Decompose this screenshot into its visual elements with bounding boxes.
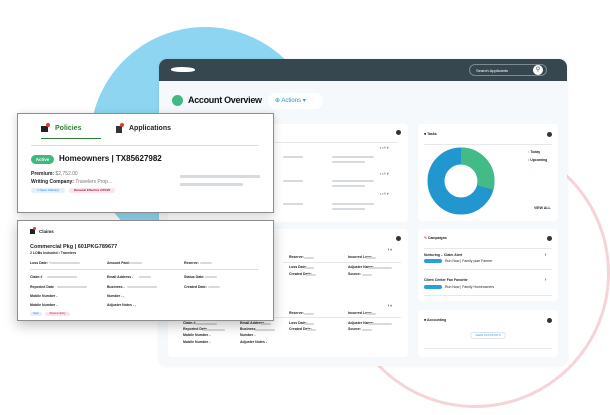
- claim title: 2 LOBs Included • Travelers: [30, 251, 76, 255]
- background: blue circle: [90, 27, 320, 257]
- card: policies list: [168, 124, 408, 222]
- card: tasks: [418, 124, 558, 221]
- card: claims list: Mobile Number -: [183, 333, 210, 337]
- card: accounting: VIEW ACCOUNTS: [475, 333, 501, 337]
- claims heading: Claims: [39, 229, 54, 234]
- card: claims list: Created Date:: [289, 327, 312, 331]
- claim fields: Email Address -: [107, 275, 133, 279]
- background: pink ring: [340, 138, 610, 408]
- policy details: Renewal Effective 2/15/25: [74, 188, 110, 192]
- claim fields: [30, 261, 259, 316]
- card: tasks: VIEW ALL: [534, 206, 551, 210]
- claim fields: Number - ,: [107, 294, 124, 298]
- card: claims list: Incurred Loss:: [348, 255, 372, 259]
- actions button: [268, 93, 323, 109]
- policy details: Writing Company: Travelers Prop...: [31, 179, 112, 185]
- card: claims list: Reserve:: [289, 311, 304, 315]
- card: claims list: Number -: [240, 333, 255, 337]
- tab: applications: [116, 123, 171, 133]
- policy details: Premium: $2,752.00: [31, 171, 78, 177]
- search box: [469, 64, 547, 76]
- policy title: Active: [36, 157, 49, 162]
- card: campaigns: ✎ Campaigns: [424, 236, 447, 240]
- account overview heading: Account Overview: [188, 95, 262, 105]
- claim title: Commercial Pkg | 601PKG789677: [30, 244, 117, 250]
- claim fields: Adjuster Notes - ,: [107, 303, 136, 307]
- tab: policies: [41, 123, 101, 139]
- card: claims list: ⁞ ˅: [388, 304, 392, 308]
- claim fields: Loss Date: ': [30, 261, 50, 265]
- dashboard window: [159, 59, 567, 366]
- card: claims list: Adjuster Name:: [348, 265, 374, 269]
- card: claims list: Source:: [348, 327, 361, 331]
- card: claims list: ⁞ ˅: [388, 248, 392, 252]
- header bar: [159, 59, 567, 81]
- claim fields: Amount Paid:: [107, 261, 130, 265]
- claim fields: Status Date:: [184, 275, 204, 279]
- card: tasks: • Upcoming: [528, 158, 547, 162]
- policy title: Homeowners | TX85627982: [59, 154, 162, 163]
- card: claims list: Reported Date: [183, 327, 207, 331]
- policy details: 1 Open Claim(s): [37, 188, 59, 192]
- card: claims list: Mobile Number -: [183, 340, 210, 344]
- icon: user: [172, 95, 183, 106]
- claim fields: Business -: [107, 285, 125, 289]
- card: claims list: Reserve:: [289, 255, 304, 259]
- card: campaigns: Nurturing – Claim Alert: [424, 253, 462, 257]
- card: claims list: Created Date:: [289, 272, 312, 276]
- icon: search: [533, 65, 543, 75]
- card: claims list: Loss Date:: [289, 265, 307, 269]
- card: policies list: ▪ ▪ ⁞ ˅: [380, 192, 389, 196]
- legend: • Today: [528, 150, 540, 154]
- card: campaigns: ⁞: [545, 278, 546, 282]
- claim fields: Open: [33, 312, 39, 315]
- panel: policies popup: [17, 113, 274, 213]
- claim fields: Mobile Number -: [30, 303, 57, 307]
- card: claims list: Loss Date:: [289, 321, 307, 325]
- card: accounting: [418, 310, 558, 357]
- claim fields: Reserve Entry: [50, 312, 65, 315]
- card: claims list: Email Address -: [240, 321, 266, 325]
- icon: search: ⚲: [536, 67, 540, 73]
- card: campaigns: ⁞: [545, 253, 546, 257]
- claim fields: Created Date:: [184, 285, 207, 289]
- tab: policies: Policies: [55, 125, 81, 132]
- card: claims list: [168, 229, 408, 357]
- claim fields: Mobile Number -: [30, 294, 57, 298]
- claim fields: Claim #: [30, 275, 42, 279]
- card: tasks: ■ Tasks: [424, 132, 437, 136]
- claims heading: [30, 227, 54, 234]
- card: claims list: Incurred Loss:: [348, 311, 372, 315]
- card: claims list: Adjuster Notes -: [240, 340, 267, 344]
- claim title: [30, 244, 117, 255]
- logo: leaping cat: [171, 67, 195, 72]
- claim fields: Reported Date: [30, 285, 54, 289]
- card: policies list: ▪ ▪ ⁞ ˅: [380, 172, 389, 176]
- card: campaigns: Run Now | Family plan Farmer: [445, 259, 492, 263]
- policy details: [31, 171, 115, 193]
- card: claims list: Business -: [240, 327, 258, 331]
- card: claims list: Claim #: [183, 321, 195, 325]
- donut chart: [428, 148, 494, 214]
- claim fields: Reserve:: [184, 261, 199, 265]
- search box: Search Applicants: [476, 68, 508, 73]
- card: accounting: ■ Accounting: [424, 318, 446, 322]
- panel: claims popup: [17, 220, 274, 321]
- tab: applications: Applications: [129, 125, 171, 132]
- card: campaigns: Client Center Fan Favorite: [424, 278, 468, 282]
- card: claims list: Adjuster Name:: [348, 321, 374, 325]
- card: campaigns: [418, 229, 558, 301]
- card: campaigns: Run Now | Family Homeowners: [445, 285, 494, 289]
- card: policies list: ▪ ▪ ⁞ ˅: [380, 146, 389, 150]
- actions button: ⊕ Actions ▾: [275, 98, 306, 104]
- card: claims list: Source:: [348, 272, 361, 276]
